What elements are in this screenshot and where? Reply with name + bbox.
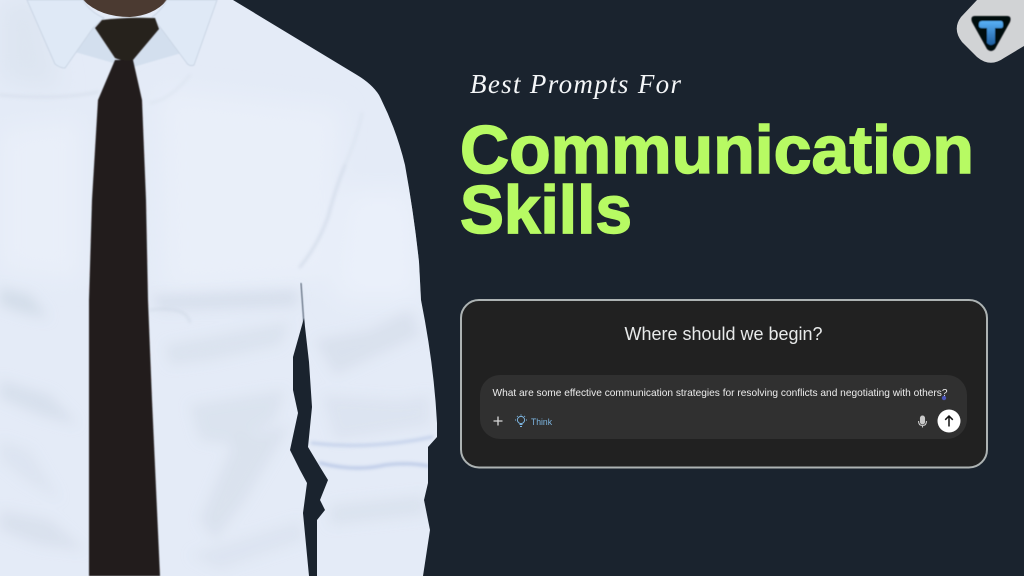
title: Skills	[460, 172, 632, 248]
arm seam	[301, 283, 304, 325]
icon: triangle T logo	[971, 16, 1011, 51]
neck	[83, 0, 167, 17]
input box	[480, 375, 967, 439]
left collar	[27, 0, 104, 68]
think label: Think	[531, 417, 552, 427]
send button	[938, 410, 960, 432]
icon: microphone	[918, 416, 926, 428]
icon: plus	[494, 416, 502, 426]
gap between body and arm	[290, 318, 328, 576]
tie	[89, 18, 160, 576]
subtitle: Best Prompts For	[470, 69, 681, 99]
logo badge	[957, 0, 1024, 63]
inner collar band	[75, 27, 185, 68]
title	[460, 112, 974, 248]
right collar	[152, 0, 217, 66]
heading: Where should we begin?	[624, 323, 822, 344]
cursor dot	[942, 396, 946, 400]
shirt	[0, 0, 450, 576]
panel: chat prompt screenshot	[461, 300, 987, 468]
icon: light bulb	[515, 414, 527, 426]
photo: man in shirt and tie	[0, 0, 450, 576]
prompt text: What are some effective communication strategies for resolving conflicts and negotiating with others?	[492, 387, 948, 399]
title: Communication	[460, 112, 974, 188]
